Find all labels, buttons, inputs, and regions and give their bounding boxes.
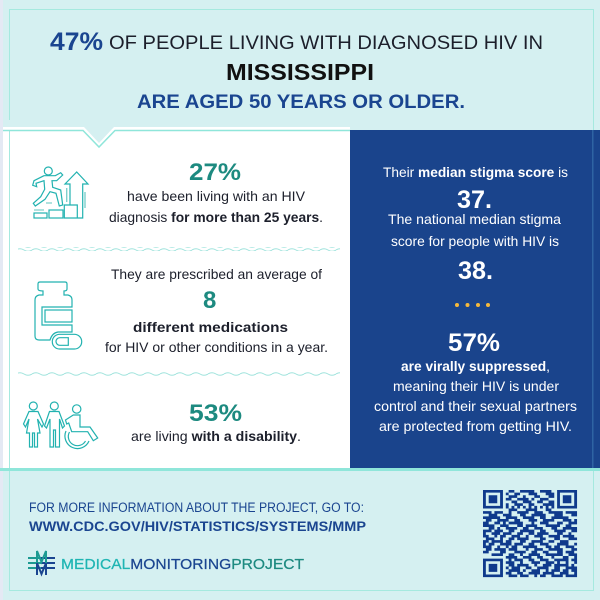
stat text: 8 xyxy=(203,287,216,314)
stat: disability xyxy=(24,400,301,449)
panel: white statistics xyxy=(3,120,350,468)
viral suppression text: control and their sexual partners xyxy=(374,398,577,414)
stigma score text xyxy=(383,164,568,285)
logo wordmark: MEDICALMONITORING PROJECT xyxy=(61,556,304,573)
title: 47% xyxy=(50,28,103,56)
description xyxy=(109,188,323,225)
footer: more information: FOR MORE INFORMATION ABOUT THE PROJECT, GO TO: xyxy=(29,500,364,515)
icon: runner climbing steps xyxy=(33,167,88,218)
title: MISSISSIPPI xyxy=(226,59,374,85)
viral suppression text: are protected from getting HIV. xyxy=(379,418,572,434)
stat: living with HIV over 25 years xyxy=(33,159,323,225)
stigma score text: The national median stigma xyxy=(388,211,561,227)
dotted divider xyxy=(455,303,490,307)
stat text xyxy=(105,266,328,355)
viral suppression text xyxy=(374,329,577,434)
icon: pill bottle and capsule xyxy=(35,282,82,349)
title: ARE AGED 50 YEARS OR OLDER. xyxy=(137,92,465,113)
description: have been living with an HIV xyxy=(127,188,306,204)
footer: more information: WWW.CDC.GOV/HIV/STATISTICS/SYSTEMS/MMP xyxy=(29,519,366,534)
footer: more information xyxy=(29,500,366,534)
logo mark xyxy=(28,551,55,575)
stat text: They are prescribed an average of xyxy=(111,266,322,282)
logo: Medical Monitoring Project xyxy=(28,551,304,575)
notch pointer xyxy=(3,120,350,147)
stat text: different medications xyxy=(133,319,288,335)
stat: medications xyxy=(35,266,328,355)
viral suppression text: meaning their HIV is under xyxy=(393,378,559,394)
figure: 53%: 53% xyxy=(189,400,242,427)
QR code xyxy=(483,490,577,577)
panel: blue statistics xyxy=(350,130,600,468)
viral suppression text: 57% xyxy=(448,329,500,357)
stat text: for HIV or other conditions in a year. xyxy=(105,339,328,355)
stigma score text: 38. xyxy=(458,257,493,285)
figure: 27%: 27% xyxy=(189,159,241,186)
description: are living with a disability. xyxy=(131,428,301,444)
icon: two people and wheelchair user xyxy=(24,402,98,449)
title xyxy=(50,28,543,113)
title: OF PEOPLE LIVING WITH DIAGNOSED HIV IN xyxy=(109,33,543,54)
description: diagnosis for more than 25 years. xyxy=(109,209,323,225)
stigma score text: score for people with HIV is xyxy=(391,233,559,249)
stigma score text: Their median stigma score is xyxy=(383,164,568,180)
stigma score text: 37. xyxy=(457,186,492,214)
viral suppression text: are virally suppressed, xyxy=(401,358,550,374)
